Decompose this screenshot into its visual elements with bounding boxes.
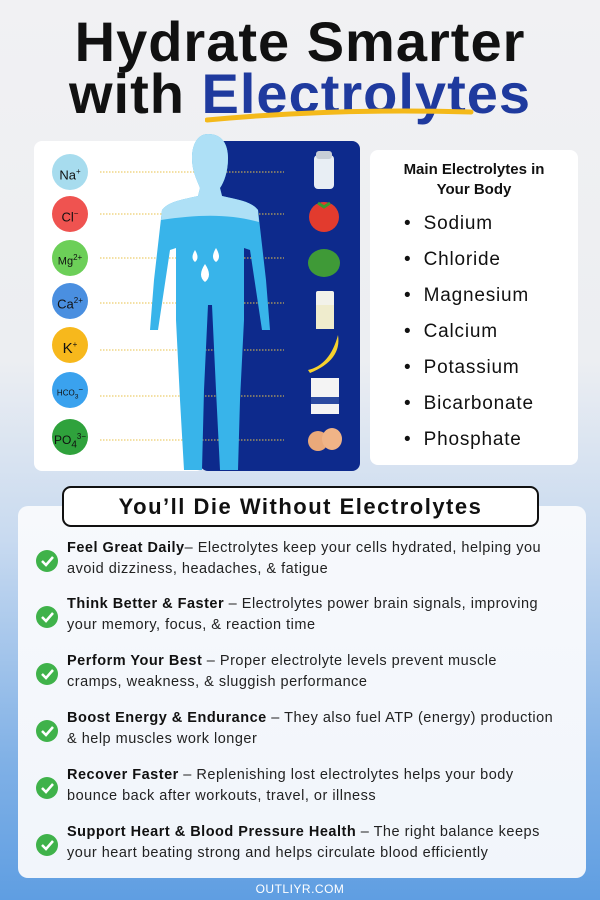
text: Perform Your Best – Proper electrolyte levels prevent muscle — [67, 653, 497, 669]
text: your memory, focus, & reaction time — [67, 617, 316, 633]
text: & help muscles work longer — [67, 731, 257, 747]
panel: main electrolytes list — [370, 150, 578, 465]
text: bounce back after workouts, travel, or illness — [67, 788, 376, 804]
icons: foods — [308, 151, 342, 451]
list heading — [404, 161, 544, 198]
title — [68, 10, 531, 125]
text: cramps, weakness, & sluggish performance — [67, 674, 367, 690]
text: K+ — [63, 340, 77, 357]
electrolyte list: • Phosphate — [404, 429, 522, 450]
electrolyte list: • Calcium — [404, 321, 498, 342]
title: Hydrate Smarter — [75, 10, 525, 73]
body figure — [150, 134, 270, 470]
benefit 4 — [36, 710, 553, 747]
icons: ions: Na+ — [59, 167, 81, 182]
panel: benefits — [18, 506, 586, 878]
text: avoid dizziness, headaches, & fatigue — [67, 561, 328, 577]
text: Ca2+ — [57, 296, 83, 311]
benefit 6 — [36, 824, 540, 861]
text: your heart beating strong and helps circulate blood efficiently — [67, 845, 488, 861]
electrolyte list: • Chloride — [404, 249, 501, 270]
electrolyte list: • Bicarbonate — [404, 393, 534, 414]
benefit 3 — [36, 653, 497, 690]
text: Mg2+ — [58, 253, 82, 268]
text: Recover Faster – Replenishing lost electrolytes helps your body — [67, 767, 514, 783]
footer: OUTLIYR.COM — [256, 882, 344, 896]
text: Think Better & Faster – Electrolytes power brain signals, improving — [67, 596, 538, 612]
text: Support Heart & Blood Pressure Health – The right balance keeps — [67, 824, 540, 840]
text: Boost Energy & Endurance – They also fuel ATP (energy) production — [67, 710, 553, 726]
icons: ions — [52, 154, 88, 190]
benefit 2 — [36, 596, 538, 633]
list heading: Main Electrolytes in — [404, 161, 544, 178]
electrolyte list: • Magnesium — [404, 285, 529, 306]
text: PO43− — [54, 432, 86, 450]
text: Feel Great Daily– Electrolytes keep your cells hydrated, helping you — [67, 540, 541, 556]
electrolyte list — [404, 213, 534, 450]
heading banner — [62, 486, 539, 527]
benefit 1 — [36, 540, 541, 577]
electrolyte list: • Potassium — [404, 357, 520, 378]
electrolyte list: • Sodium — [404, 213, 493, 234]
text: HCO3− — [57, 385, 83, 400]
text: Cl− — [62, 209, 78, 224]
title: with Electrolytes — [69, 62, 531, 125]
heading banner: You’ll Die Without Electrolytes — [119, 494, 482, 519]
list heading: Your Body — [437, 181, 511, 198]
panel: electrolyte diagram — [34, 141, 360, 471]
benefit 5 — [36, 767, 514, 804]
underline swoosh — [205, 108, 474, 122]
